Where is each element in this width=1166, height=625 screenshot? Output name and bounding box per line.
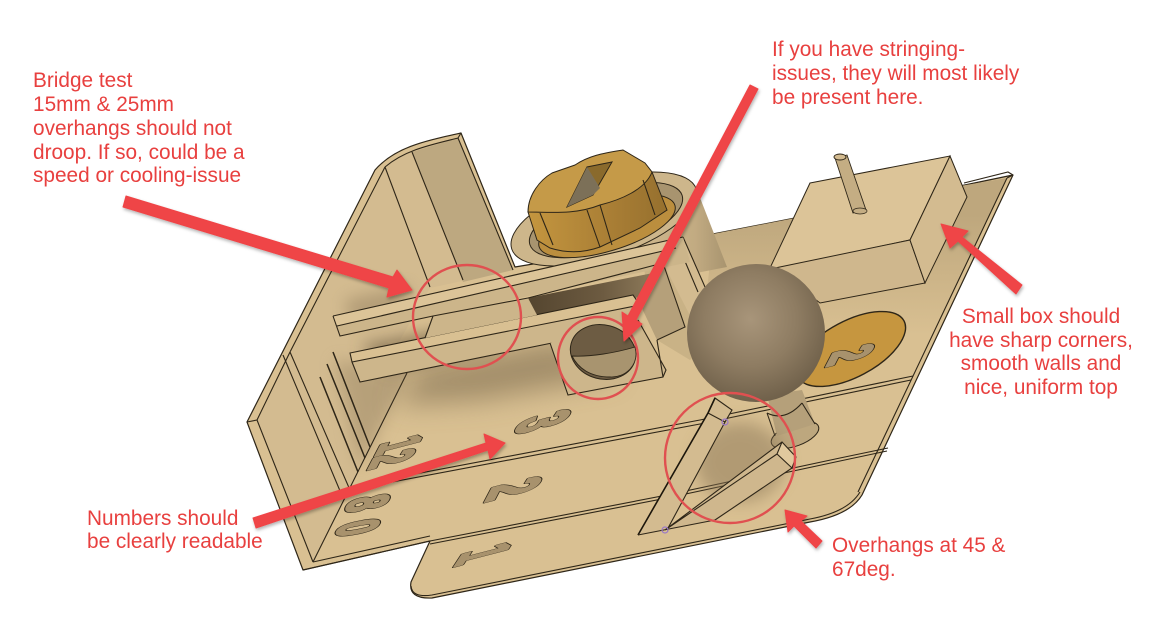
text: stringing note: If you have stringing- [772, 38, 965, 61]
gold coin with number 2 [785, 296, 917, 402]
silhouette of base plate [247, 133, 1013, 598]
back wall panels [290, 133, 513, 352]
text: overhangs note [832, 534, 1006, 581]
text: bridge test note: speed or cooling-issue [33, 164, 241, 187]
text: stringing note: be present here. [772, 86, 923, 109]
small box [770, 154, 967, 303]
text: bridge test note: Bridge test [33, 69, 133, 92]
text: numbers note: be clearly readable [87, 530, 263, 553]
block with stringing hole [550, 317, 666, 395]
raised floor number 1: 1 [438, 536, 528, 572]
raised floor number 3: 3 [497, 403, 586, 441]
post on box [834, 154, 867, 214]
overhang 45 degree wedge [638, 442, 796, 535]
text: numbers note: Numbers should [87, 507, 238, 530]
text: small box note: nice, uniform top [964, 376, 1118, 399]
text: stringing note [772, 38, 1020, 109]
text: bridge test note: 15mm & 25mm [33, 93, 174, 116]
callout circle: bridge [413, 265, 521, 369]
gold coin with number 2: 2 [812, 338, 888, 371]
text: small box note [949, 305, 1133, 399]
lower bridge bar [350, 295, 640, 382]
text: overhangs note: 67deg. [832, 558, 896, 581]
raised floor number 12: 12 [354, 429, 436, 475]
arrow: numbers [253, 434, 505, 528]
text: small box note: Small box should [962, 305, 1120, 328]
text: stringing note: issues, they will most likely [772, 62, 1020, 85]
arrow: overhangs [785, 510, 822, 548]
raised floor number 12: 12 [354, 429, 436, 475]
raised floor number 80: 80 [319, 490, 402, 551]
model: base plate and walls [247, 133, 1013, 598]
raised floor number 2: 2 [468, 470, 557, 508]
text: bridge test note: overhangs should not [33, 117, 232, 140]
gold knob [528, 150, 682, 271]
shadow around overhangs [695, 422, 785, 502]
sphere [687, 264, 825, 402]
gold coin with number 2: 2 [812, 338, 888, 371]
arrow: stringing [622, 85, 758, 341]
floor shading under bridges [345, 285, 620, 405]
overhang 67 degree wedge [638, 398, 732, 535]
callout circle: overhangs [665, 393, 795, 523]
arrow: bridge test [123, 196, 412, 297]
callout circle: stringing [558, 317, 638, 399]
right pillar [638, 237, 722, 360]
neck under sphere [767, 390, 822, 454]
recess under upper bridge [528, 273, 653, 318]
text: numbers note [87, 507, 263, 553]
text: bridge test note: droop. If so, could be a [33, 141, 245, 164]
text: bridge test note [33, 69, 245, 187]
text: overhangs note: Overhangs at 45 & [832, 534, 1006, 557]
arrow: small box [941, 224, 1022, 294]
plate floor behind box [690, 178, 1007, 450]
knob mount ring [500, 153, 727, 285]
raised floor number 80: 80 [319, 490, 402, 551]
raised floor number 2: 2 [468, 470, 557, 508]
upper bridge bar [333, 237, 690, 338]
left partition [247, 330, 407, 562]
raised floor number 1: 1 [438, 536, 528, 572]
plate step lines [303, 376, 913, 596]
raised floor number 3: 3 [497, 403, 586, 441]
text: small box note: have sharp corners, [949, 329, 1133, 352]
text: small box note: smooth walls and [961, 352, 1121, 375]
